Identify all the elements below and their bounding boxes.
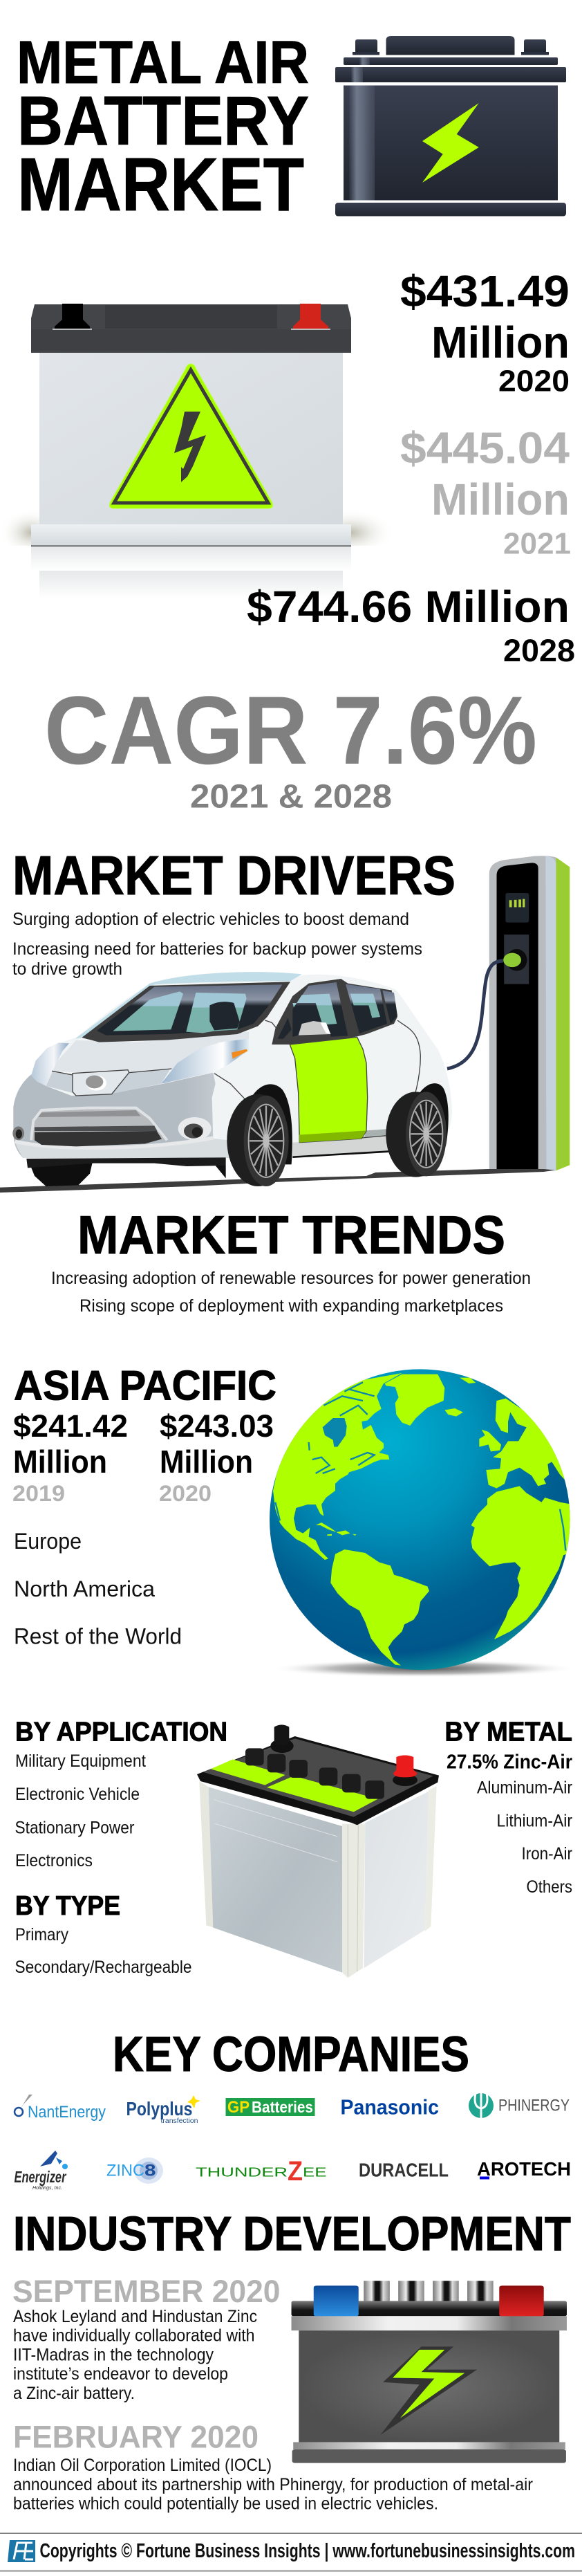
logo: Panasonic: Panasonic: [340, 2095, 439, 2119]
logo: Polyplus: Polyplus: [126, 2098, 192, 2119]
stat: asia pacific 2019: 2019: [12, 1481, 65, 1506]
list: type segments: Secondary/Rechargeable: [15, 1958, 192, 1977]
text: september development: have individually collaborated with: [13, 2326, 254, 2345]
icon: car battery: [197, 1724, 439, 1978]
icon: charging station: [447, 856, 570, 1170]
stat: asia pacific 2020: 2020: [159, 1481, 212, 1506]
logo: ThunderZee: EE: [303, 2165, 326, 2179]
title: [17, 29, 309, 227]
logo: Duracell: DURACELL: [359, 2160, 449, 2180]
logo: Arotech: AROTECH: [477, 2158, 571, 2180]
stat: asia pacific 2020: [159, 1408, 274, 1506]
text: other regions: Europe: [14, 1529, 82, 1554]
panel: segments: [15, 1717, 572, 1978]
logo: Energizer: Energizer: [14, 2168, 66, 2186]
list: metal segments: Iron-Air: [521, 1844, 572, 1864]
text: other regions: Rest of the World: [14, 1624, 182, 1649]
logo: Energizer: [14, 2151, 68, 2191]
logo: GP Batteries: GP: [227, 2098, 250, 2117]
text: driver two: to drive growth: [12, 959, 122, 979]
text: september development: institute’s endeavor to develop: [13, 2364, 228, 2384]
logo: Zinc8: [106, 2158, 163, 2184]
stat: 2021 value: [400, 423, 571, 560]
list: type segments: Primary: [15, 1925, 68, 1944]
text: february development: [13, 2456, 533, 2514]
text: september development: IIT-Madras in the technology: [13, 2345, 214, 2364]
stat: 2021 value: $445.04: [400, 423, 570, 473]
text: trend two: Rising scope of deployment with expanding marketplaces: [79, 1296, 503, 1316]
heading: september 2020: SEPTEMBER 2020: [12, 2274, 281, 2309]
stat: asia pacific 2019: $241.42: [13, 1408, 128, 1444]
stat: 2020 value: Million: [431, 318, 570, 367]
logo: NantEnergy: NantEnergy: [28, 2103, 106, 2122]
logo: ThunderZee: Z: [288, 2156, 303, 2187]
logo: Zinc8: 8: [144, 2161, 156, 2180]
icon: globe: [270, 1369, 576, 1677]
heading: asia pacific: ASIA PACIFIC: [14, 1363, 276, 1408]
stat: CAGR: 2021 & 2028: [190, 779, 392, 815]
panel: regions: [12, 1363, 576, 1677]
icon: dark battery: [335, 36, 566, 216]
text: february development: Indian Oil Corporation Limited (IOCL): [13, 2456, 272, 2475]
stat: zinc-air share: 27.5% Zinc-Air: [447, 1751, 572, 1774]
text: driver one: Surging adoption of electric vehicles to boost demand: [12, 910, 409, 929]
logo: Polyplus: transfection: [160, 2117, 198, 2125]
logo: Polyplus: [126, 2095, 200, 2125]
stat: asia pacific 2020: Million: [160, 1444, 253, 1480]
list: application segments: [15, 1751, 146, 1870]
icon: light battery with warning sign: [0, 304, 394, 598]
list: application segments: Stationary Power: [15, 1818, 134, 1837]
stat: 2028 value: $744.66 Million: [247, 582, 570, 632]
logo: Energizer: Holdings, Inc.: [32, 2186, 62, 2191]
logo: Zinc8: ZINC: [106, 2161, 144, 2180]
stat: 2028 value: [247, 582, 575, 668]
text: other regions: [14, 1529, 182, 1649]
icon: grey battery: [292, 2281, 567, 2463]
list: metal segments: Lithium-Air: [496, 1811, 572, 1830]
stat: 2021 value: Million: [431, 475, 570, 524]
logo: NantEnergy: [15, 2095, 106, 2122]
list: application segments: Military Equipment: [15, 1751, 146, 1771]
logo: Phinergy: [469, 2092, 570, 2119]
title: BATTERY: [17, 82, 309, 160]
stat: asia pacific 2020: $243.03: [160, 1408, 274, 1444]
heading: by metal: BY METAL: [445, 1717, 572, 1747]
logo: ThunderZee: THUNDER: [196, 2165, 288, 2179]
heading: market drivers: MARKET DRIVERS: [12, 845, 456, 906]
logo: GP Batteries: Batteries: [252, 2098, 313, 2116]
title: METAL AIR: [17, 29, 309, 96]
stat: 2020 value: [400, 266, 570, 398]
icon: fortune business insights logo: [8, 2540, 35, 2562]
logo: GP Batteries: [225, 2098, 315, 2117]
icon: electric car: [0, 972, 555, 1193]
heading: by application: BY APPLICATION: [15, 1717, 227, 1747]
panel: market trends: [51, 1204, 531, 1316]
heading: market trends: MARKET TRENDS: [77, 1204, 505, 1265]
list: metal segments: Others: [527, 1877, 572, 1897]
stat: 2028 value: 2028: [503, 633, 575, 668]
panel: industry development: [12, 2207, 571, 2514]
list: application segments: Electronic Vehicle: [15, 1785, 140, 1804]
text: february development: batteries which could potentially be used in electric vehicles.: [13, 2494, 438, 2514]
text: september development: a Zinc-air battery.: [13, 2384, 135, 2403]
heading: february 2020: FEBRUARY 2020: [13, 2420, 259, 2454]
list: metal segments: [477, 1778, 572, 1897]
stat: asia pacific 2019: Million: [13, 1444, 107, 1480]
list: metal segments: Aluminum-Air: [477, 1778, 572, 1797]
panel: key companies: [14, 2027, 571, 2191]
heading: by type: BY TYPE: [15, 1891, 120, 1921]
text: driver two: Increasing need for batteries for backup power systems: [12, 939, 422, 959]
list: application segments: Electronics: [15, 1851, 93, 1870]
text: september development: Ashok Leyland and Hindustan Zinc: [13, 2307, 257, 2326]
stat: 2021 value: 2021: [503, 527, 571, 560]
text: trend one: Increasing adoption of renewable resources for power generation: [51, 1269, 531, 1288]
text: february development: announced about its partnership with Phinergy, for production of metal-air: [13, 2475, 533, 2494]
text: driver two: [12, 939, 422, 979]
stat: 2020 value: 2020: [498, 364, 570, 398]
text: other regions: North America: [14, 1576, 155, 1601]
panel: market drivers: [0, 845, 570, 1193]
heading: key companies: KEY COMPANIES: [113, 2027, 469, 2082]
text: september development: [13, 2307, 257, 2403]
title: MARKET: [17, 142, 304, 227]
list: type segments: [15, 1925, 192, 1977]
stat: asia pacific 2019: [12, 1408, 128, 1506]
stat: 2020 value: $431.49: [400, 266, 570, 316]
footer: [0, 2533, 582, 2572]
stat: CAGR: CAGR 7.6%: [44, 676, 537, 784]
logo: ThunderZee: [196, 2156, 326, 2187]
